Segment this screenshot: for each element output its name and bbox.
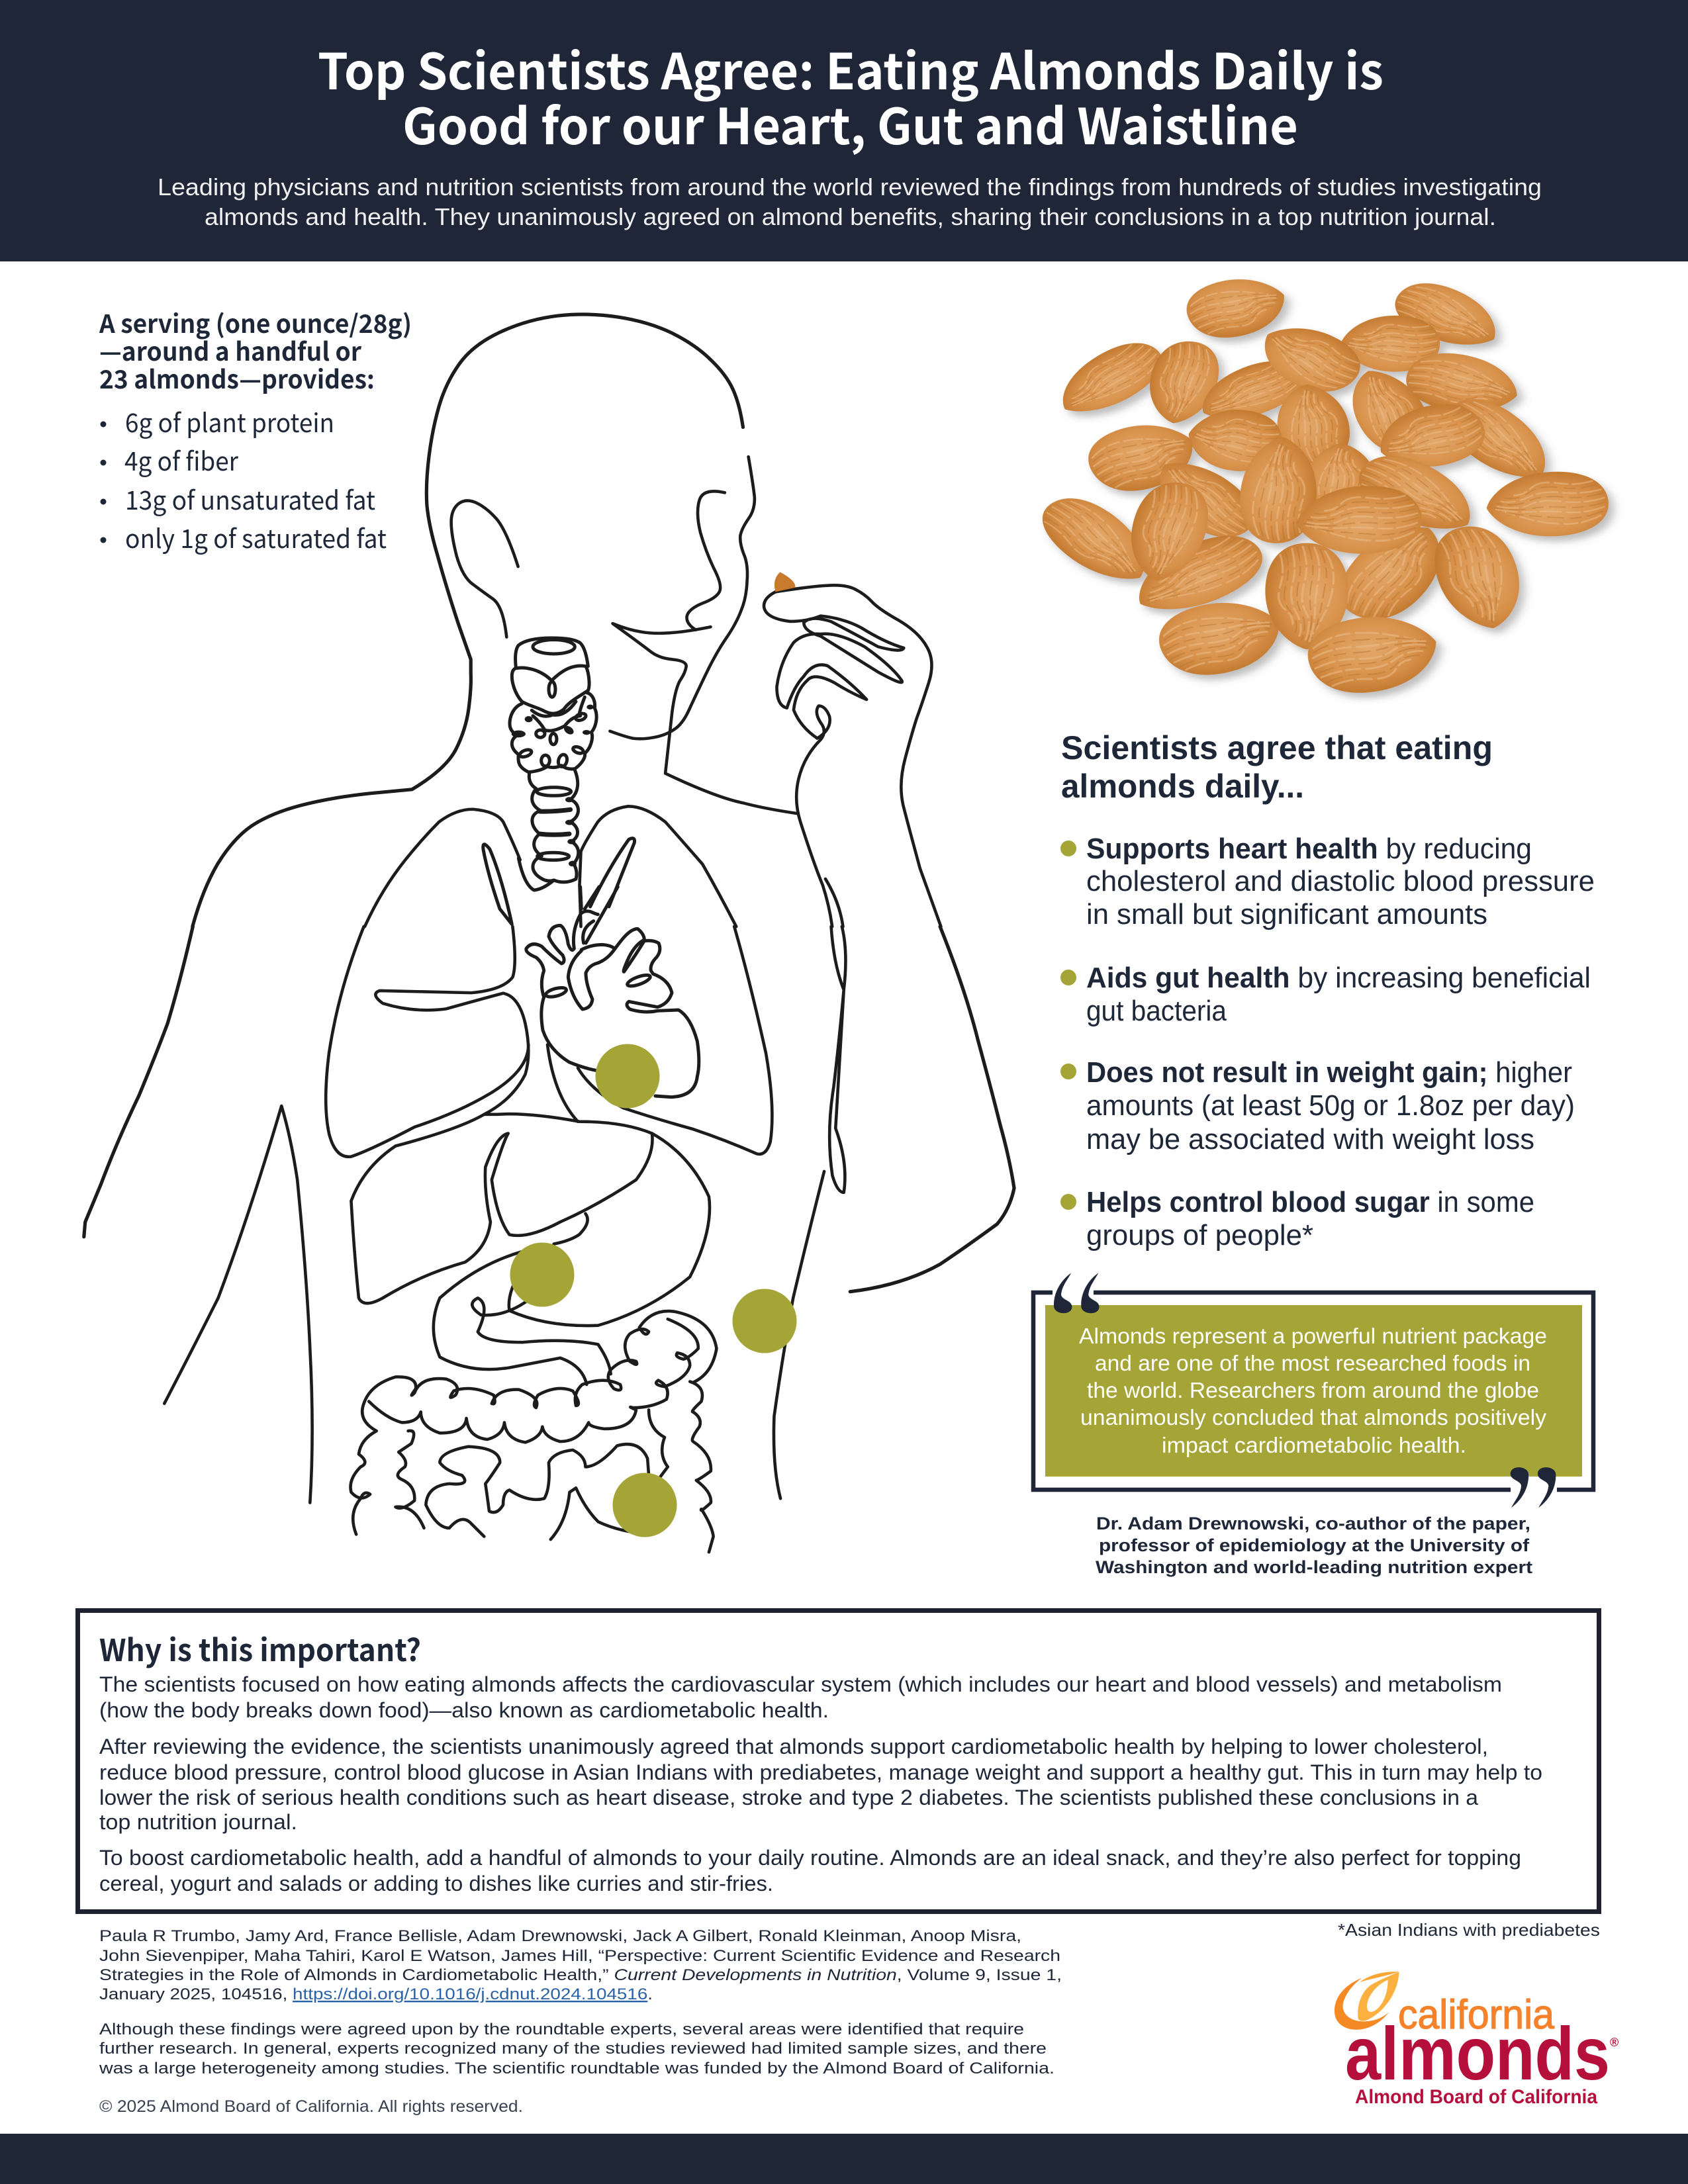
thyroid — [510, 693, 596, 772]
left lung — [326, 927, 528, 1157]
disclosure note: was a large heterogeneity among studies. The scientific roundtable was funded by the Almond Board of California. — [99, 2060, 1055, 2077]
logo: California Almonds — [1335, 1972, 1618, 2108]
larynx, thyroid and trachea — [483, 638, 635, 925]
citation: Strategies in the Role of Almonds in Cardiometabolic Health,” Current Developments in Nutrition , Volume 9, Issue 1, — [99, 1966, 1062, 1984]
logo: California Almonds: Almond Board of California — [1355, 2086, 1597, 2108]
fingers — [764, 592, 904, 708]
panel heading: Scientists agree that eating — [1061, 729, 1493, 766]
right torso side — [774, 1171, 824, 1498]
icon: closing quote mark — [1511, 1467, 1556, 1508]
benefit: heart: Supports heart health by reducing — [1086, 833, 1532, 865]
serving list: only 1g of saturated fat — [125, 519, 387, 556]
panel heading: almonds daily... — [1061, 768, 1304, 805]
panel: why is this important — [78, 1611, 1599, 1911]
paragraph 2: After reviewing the evidence, the scientists unanimously agreed that almonds support cardiometabolic health by helping to lower cholesterol, — [99, 1735, 1488, 1758]
quote text: and are one of the most researched foods in — [1095, 1351, 1530, 1375]
head and left shoulder outline — [193, 314, 743, 927]
stomach — [509, 1134, 710, 1326]
benefit: blood sugar — [1060, 1186, 1534, 1251]
panel heading: Why is this important? — [99, 1627, 421, 1670]
lungs upper — [365, 809, 520, 927]
logo: California Almonds: ® — [1610, 2036, 1618, 2049]
benefit: heart: cholesterol and diastolic blood pressure — [1086, 865, 1595, 897]
descending vessel — [547, 1045, 578, 1122]
serving list: 4g of fiber — [124, 441, 239, 478]
footer band — [0, 2134, 1688, 2184]
upper body, head and hand — [193, 314, 941, 927]
serving information — [99, 304, 412, 556]
header band — [0, 0, 1688, 261]
quote text: the world. Researchers from around the globe — [1087, 1378, 1539, 1402]
disclosure note: further research. In general, experts recognized many of the studies reviewed had limited sample sizes, and there — [99, 2040, 1047, 2058]
marker: heart — [596, 1044, 659, 1108]
serving heading: 23 almonds—provides: — [99, 359, 375, 396]
citation: January 2025, 104516, https://doi.org/10.1016/j.cdnut.2024.104516 . — [99, 1985, 653, 2003]
liver — [351, 1114, 653, 1303]
marker: gut — [510, 1243, 575, 1306]
benefit: blood sugar: Helps control blood sugar in some — [1086, 1186, 1534, 1218]
quote text: unanimously concluded that almonds positively — [1080, 1405, 1546, 1430]
benefit: weight — [1060, 1056, 1575, 1156]
almonds photo illustration — [1025, 269, 1613, 702]
disclosure note — [99, 2021, 1055, 2077]
paragraph 1: (how the body breaks down food)—also known as cardiometabolic health. — [99, 1698, 829, 1722]
copyright: © 2025 Almond Board of California. All rights reserved. — [99, 2097, 523, 2116]
mouth, chin and neck — [613, 623, 797, 813]
subtitle — [158, 173, 1542, 230]
inner forearm lines — [829, 927, 845, 1193]
larynx — [512, 638, 589, 713]
large intestine — [351, 1311, 716, 1552]
paragraph 3: To boost cardiometabolic health, add a handful of almonds to your daily routine. Almonds are an ideal snack, and they’re also perfect for topping — [99, 1846, 1521, 1870]
serving list: 6g of plant protein — [125, 403, 334, 440]
quote text — [1079, 1324, 1547, 1457]
paragraph 2: reduce blood pressure, control blood glucose in Asian Indians with prediabetes, manage weight and support a healthy gut. This in turn may help to — [99, 1760, 1542, 1784]
benefit: weight: amounts (at least 50g or 1.8oz per day) — [1086, 1089, 1575, 1122]
almond in fingers — [774, 572, 795, 592]
icon: opening quote mark — [1054, 1273, 1100, 1313]
paragraph 3: cereal, yogurt and salads or adding to dishes like curries and stir-fries. — [99, 1872, 773, 1895]
right lung — [578, 927, 772, 1154]
serving heading: A serving (one ounce/28g) — [99, 304, 412, 340]
marker: lower gut — [613, 1473, 677, 1537]
benefit: gut — [1060, 962, 1591, 1027]
title: Top Scientists Agree: Eating Almonds Daily is — [318, 32, 1383, 104]
paragraph 2: top nutrition journal. — [99, 1810, 297, 1834]
benefit: blood sugar: groups of people* — [1086, 1219, 1313, 1251]
citation: Paula R Trumbo, Jamy Ard, France Bellisle, Adam Drewnowski, Jack A Gilbert, Ronald Kleinman, Anoop Misra, — [99, 1927, 1021, 1945]
left arm outer — [84, 927, 193, 1237]
panel heading — [1061, 729, 1493, 805]
serving heading: —around a handful or — [99, 332, 361, 368]
icon: almond swoosh — [1335, 1972, 1399, 2030]
lung inner lines and bottom of trachea — [518, 858, 554, 890]
benefit: gut: Aids gut health by increasing beneficial — [1086, 962, 1591, 994]
logo: California Almonds: almonds — [1345, 2012, 1610, 2095]
small intestine — [426, 1444, 652, 1539]
serving heading — [99, 304, 412, 396]
paragraph 3 — [99, 1846, 1521, 1895]
paragraph 2: lower the risk of serious health conditions such as heart disease, stroke and type 2 diabetes. The scientists published these conclusions in a — [99, 1786, 1478, 1809]
quote text: Almonds represent a powerful nutrient package — [1079, 1324, 1547, 1348]
marker: waist — [732, 1289, 797, 1353]
face profile — [610, 457, 755, 739]
title: Good for our Heart, Gut and Waistline — [402, 87, 1298, 159]
benefit: gut: gut bacteria — [1086, 995, 1227, 1027]
thumb and forearm — [787, 664, 867, 927]
subtitle: almonds and health. They unanimously agreed on almond benefits, sharing their conclusions in a top nutrition journal. — [205, 203, 1496, 230]
citation — [99, 1927, 1062, 2003]
quote attribution: Washington and world-leading nutrition expert — [1096, 1557, 1532, 1577]
quote attribution: professor of epidemiology at the University of — [1099, 1535, 1530, 1555]
quote text: impact cardiometabolic health. — [1162, 1433, 1466, 1457]
subtitle: Leading physicians and nutrition scientists from around the world reviewed the findings from hundreds of studies investigating — [158, 173, 1542, 201]
logo: California Almonds: california — [1398, 1992, 1554, 2038]
green markers — [510, 1044, 797, 1537]
title — [318, 32, 1383, 159]
citation: John Sievenpiper, Maha Tahiri, Karol E Watson, James Hill, “Perspective: Current Scientific Evidence and Research — [99, 1947, 1060, 1965]
nose — [687, 491, 725, 630]
benefit: weight: may be associated with weight loss — [1086, 1123, 1534, 1156]
serving list: 13g of unsaturated fat — [125, 480, 375, 518]
callout: quote — [1033, 1273, 1593, 1577]
paragraph 1: The scientists focused on how eating almonds affects the cardiovascular system (which includes our heart and blood vessels) and metabolism — [99, 1672, 1502, 1696]
right arm and elbow — [850, 927, 1014, 1292]
paragraph 1 — [99, 1672, 1502, 1722]
footnote: *Asian Indians with prediabetes — [1338, 1920, 1600, 1940]
torso and organs — [84, 927, 1014, 1552]
paragraph 2 — [99, 1735, 1542, 1834]
disclosure note: Although these findings were agreed upon by the roundtable experts, several areas were identified that require — [99, 2021, 1024, 2038]
panel: scientists agree — [1060, 729, 1595, 1251]
ear — [451, 501, 518, 637]
benefit: heart — [1060, 833, 1595, 931]
trachea — [529, 770, 579, 882]
body illustration: line drawing of person with organs — [84, 314, 1014, 1552]
serving list — [101, 403, 387, 556]
left arm inner and torso side — [164, 1106, 312, 1503]
hand outer — [775, 585, 941, 927]
benefit: weight: Does not result in weight gain; higher — [1086, 1056, 1572, 1089]
quote attribution: Dr. Adam Drewnowski, co-author of the paper, — [1096, 1514, 1530, 1533]
quote attribution — [1096, 1514, 1532, 1577]
benefit: heart: in small but significant amounts — [1086, 898, 1487, 931]
heart — [526, 887, 699, 1097]
